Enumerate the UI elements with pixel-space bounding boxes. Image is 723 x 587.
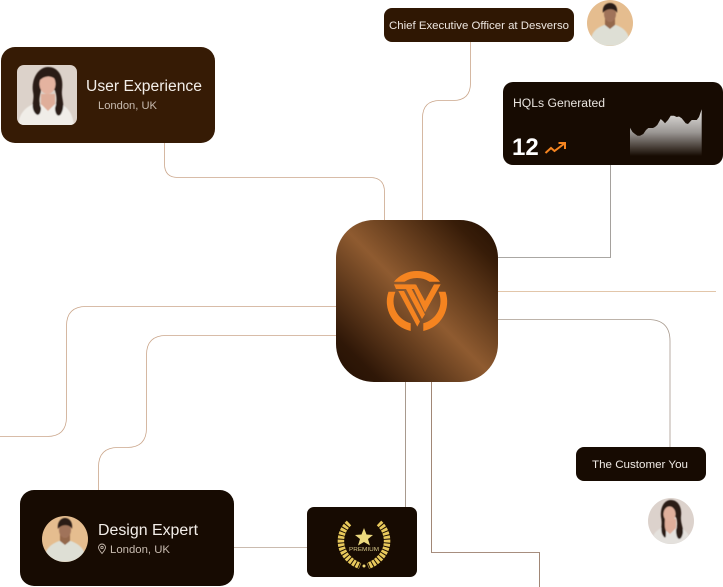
connector: hub to customer card — [498, 320, 670, 447]
icon: trend arrow — [546, 143, 565, 153]
connector: hub to left edge — [0, 306, 338, 436]
icon: laurel wreath — [341, 523, 387, 566]
heading: user experience: User Experience — [86, 78, 202, 95]
chart: area sparkline — [630, 109, 702, 156]
text: premium: PREMIUM — [349, 547, 379, 553]
connector: CEO card to hub — [422, 42, 470, 220]
heading: design expert: Design Expert — [98, 522, 199, 539]
panel: user experience card — [1, 47, 215, 143]
panel: premium badge — [307, 507, 417, 577]
icon: star — [355, 528, 373, 546]
panel: central hub with logo — [336, 220, 498, 382]
panel: customer label: The Customer You — [592, 459, 688, 471]
connector: hub to premium badge — [404, 382, 406, 507]
avatar: customer woman — [648, 498, 694, 544]
avatar: man — [42, 516, 88, 562]
connector: hub to right edge — [498, 290, 716, 292]
connector: hub to bottom edge — [432, 382, 540, 587]
text: location: London, UK — [98, 100, 158, 112]
connector: hub to design expert card — [98, 336, 338, 490]
icon: orange V logo — [387, 271, 447, 331]
connector: HQL card to hub — [498, 165, 610, 258]
panel: CEO label: Chief Executive Officer at Desverso — [389, 20, 569, 32]
panel: customer label — [576, 447, 706, 481]
avatar: CEO man — [587, 0, 633, 46]
connector: design expert card to premium badge — [234, 546, 307, 548]
panel: CEO label — [384, 8, 574, 42]
number: 12: 12 — [512, 134, 539, 161]
text: location: London, UK — [110, 544, 171, 556]
panel: design expert card — [20, 490, 234, 586]
icon: wreath knot — [362, 564, 366, 568]
heading: HQLs generated: HQLs Generated — [513, 98, 605, 110]
connector: user card to hub — [164, 143, 384, 220]
icon: location pin — [98, 544, 106, 554]
photo: woman — [17, 65, 77, 126]
panel: HQLs generated card — [503, 82, 723, 165]
